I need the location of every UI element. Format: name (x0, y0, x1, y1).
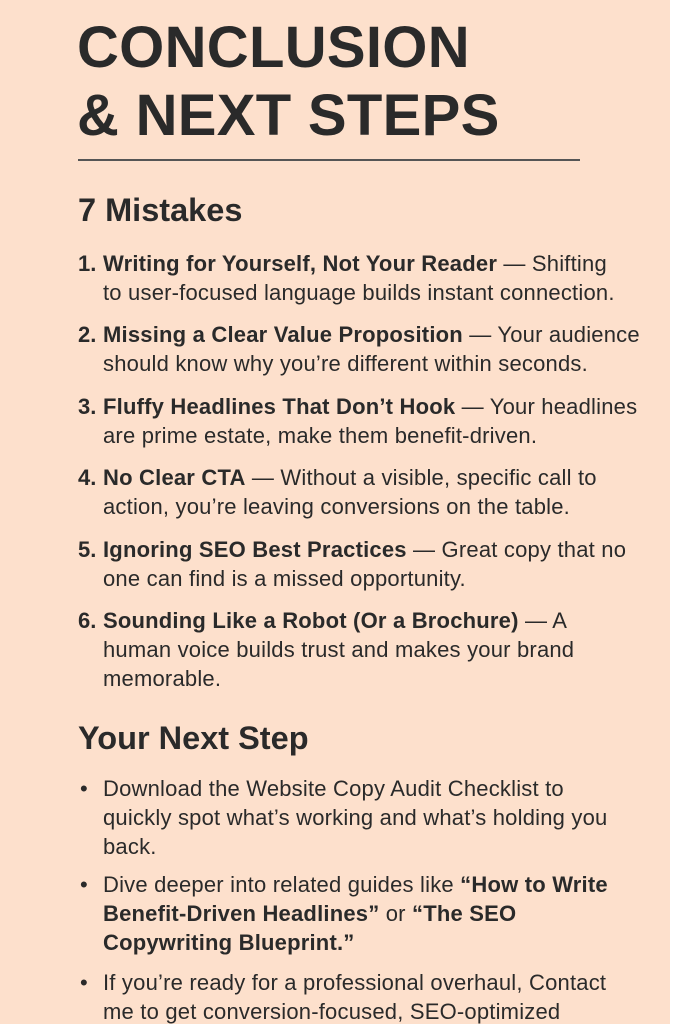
bullet 3: me to get conversion-focused, SEO-optimized (103, 998, 560, 1024)
bullet 2 (80, 872, 608, 954)
item 1: Writing for Yourself, Not Your Reader — Shifting (103, 250, 607, 276)
bullet 3 (80, 970, 606, 1024)
item 5: one can find is a missed opportunity. (103, 566, 466, 590)
title: & NEXT STEPS (77, 83, 500, 148)
bullet 1: • (80, 776, 88, 800)
bullet 2: Benefit-Driven Headlines” or “The SEO (103, 900, 516, 926)
item 2 (78, 322, 640, 376)
item 4: No Clear CTA — Without a visible, specific call to (103, 464, 597, 490)
bullet 2: Dive deeper into related guides like “How to Write (103, 872, 608, 896)
item 3: Fluffy Headlines That Don’t Hook — Your headlines (103, 394, 637, 418)
item 1 (78, 250, 615, 304)
item 6: 6. (78, 608, 96, 632)
bullet 2: Copywriting Blueprint.” (103, 930, 354, 954)
item 1: to user-focused language builds instant connection. (103, 280, 615, 304)
bullet 3: • (80, 970, 88, 994)
item 6: memorable. (103, 666, 221, 691)
bullet 1: Download the Website Copy Audit Checklist to (103, 776, 564, 800)
item 5: 5. (78, 536, 96, 562)
list: mistakes (78, 250, 640, 691)
title: CONCLUSION (77, 15, 470, 80)
item 2: Missing a Clear Value Proposition — Your audience (103, 322, 640, 346)
bullet 3: If you’re ready for a professional overhaul, Contact (103, 970, 606, 994)
item 6: Sounding Like a Robot (Or a Brochure) — A (103, 608, 567, 632)
item 3: 3. (78, 394, 96, 418)
item 3: are prime estate, make them benefit-driven. (103, 422, 537, 448)
item 4: action, you’re leaving conversions on the table. (103, 494, 570, 518)
item 4: 4. (78, 464, 96, 490)
title (77, 15, 500, 148)
bullet 2: • (80, 872, 88, 896)
bullet 1: quickly spot what’s working and what’s holding you (103, 804, 607, 830)
item 1: 1. (78, 250, 96, 276)
heading: Your Next Step: Your Next Step (78, 720, 309, 756)
item 5: Ignoring SEO Best Practices — Great copy that no (103, 536, 626, 562)
item 6 (78, 608, 574, 691)
item 4 (78, 464, 597, 518)
item 5 (78, 536, 626, 590)
item 6: human voice builds trust and makes your brand (103, 637, 574, 662)
bullet 1 (80, 776, 607, 858)
item 3 (78, 394, 637, 448)
item 2: 2. (78, 322, 96, 346)
bullet 1: back. (103, 834, 157, 858)
list: next steps (80, 776, 608, 1024)
heading: 7 Mistakes: 7 Mistakes (78, 192, 242, 228)
item 2: should know why you’re different within seconds. (103, 350, 588, 376)
